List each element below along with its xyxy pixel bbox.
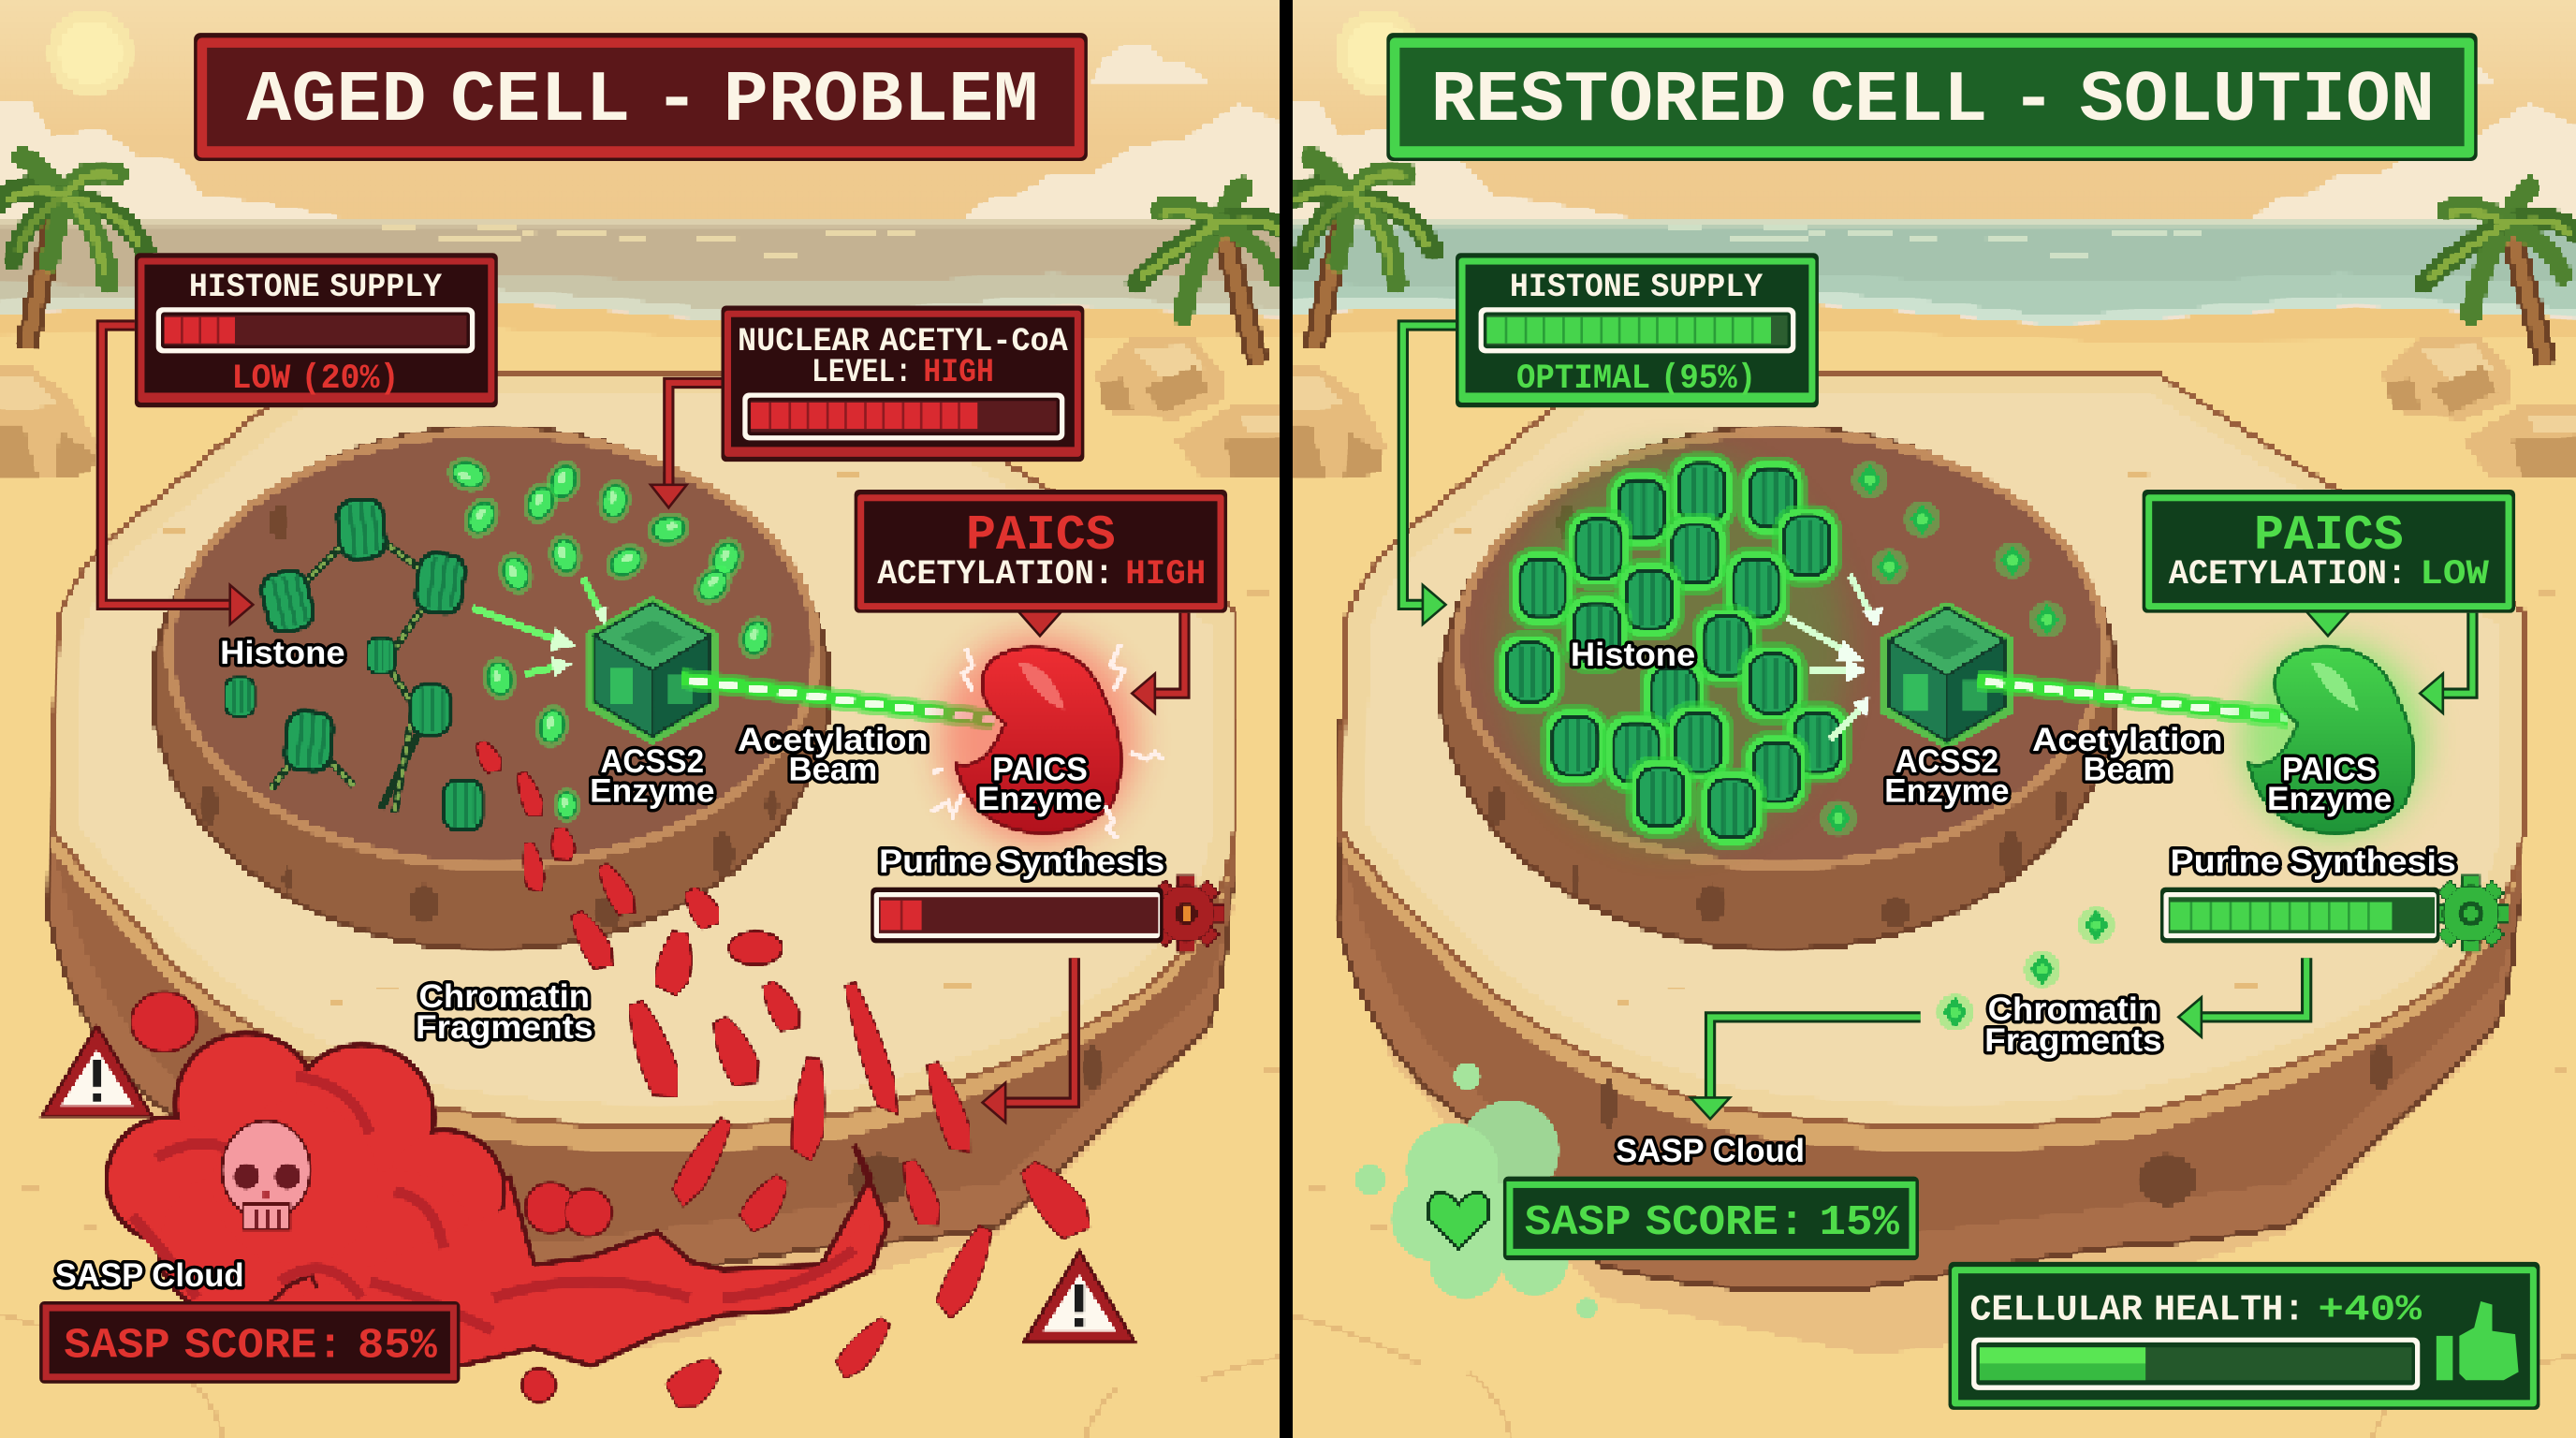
beach scene and cell platform, left: [0, 0, 1298, 1438]
title: aged cell: AGED CELL - PROBLEM: [246, 61, 1038, 142]
label: PAICS Enzyme: PAICS: [992, 752, 1088, 788]
SASP cloud with tail: [107, 1034, 887, 1365]
panel: nuclear acetyl-CoA: [721, 305, 1084, 462]
beach scene and cell platform, right: [1271, 0, 2576, 1438]
icon: skull: [222, 1121, 311, 1229]
free acetyl dots: [1821, 462, 2115, 1030]
panel: nuclear acetyl-CoA: NUCLEAR ACETYL-CoA: [738, 323, 1069, 360]
cell contents, right: [1355, 452, 2509, 1318]
ACSS2 enzyme cube: [1881, 601, 2012, 749]
panel: PAICS acetylation low: PAICS: [2254, 507, 2404, 564]
connector: PAICS box to enzyme: [2420, 613, 2472, 713]
panel: histone supply: OPTIMAL (95%): [1516, 360, 1756, 399]
panel: restored cell (solution): [1271, 0, 2576, 1438]
gear, green: [2433, 875, 2509, 951]
label: Acetylation Beam: Acetylation: [738, 722, 929, 758]
panel text and UI, right: [1386, 33, 2539, 1410]
panel: cellular health: +40%: [2318, 1289, 2422, 1330]
label: Chromatin Fragments: Chromatin: [419, 978, 590, 1015]
gauge: purine synthesis: [2160, 888, 2439, 943]
connector: histone supply to histone: [102, 326, 253, 624]
gauge: purine synthesis: [871, 888, 1164, 943]
label: ACSS2 Enzyme: [1884, 743, 2009, 809]
PAICS enzyme, red: [931, 634, 1164, 844]
panel: cellular health: [1949, 1262, 2539, 1410]
connector: purine synthesis to fragments: [983, 958, 1075, 1123]
connector: purine to fragments: [2178, 958, 2306, 1036]
flow arrows into ACSS2: [1788, 575, 1882, 740]
label: Chromatin Fragments: Chromatin: [1988, 991, 2159, 1028]
gear, red: [1149, 875, 1224, 951]
cell contents, left: [43, 452, 1224, 1416]
panel: PAICS acetylation low: [2143, 490, 2515, 636]
label: Chromatin Fragments: Fragments: [1984, 1022, 2162, 1059]
label: ACSS2 Enzyme: Enzyme: [1884, 772, 2009, 809]
ACSS2 enzyme cube: [587, 596, 718, 744]
panel: PAICS acetylation high: [855, 490, 1227, 636]
title: aged cell: [194, 33, 1088, 161]
label: Purine Synthesis: Purine Synthesis: [2170, 844, 2456, 880]
icon: thumbs up: [2437, 1301, 2519, 1380]
divider: [1280, 0, 1295, 1438]
flow arrows into ACSS2: [473, 579, 607, 677]
label: PAICS Enzyme: [977, 752, 1103, 817]
acetylation beam: [681, 679, 994, 720]
red chromatin fragments: [131, 738, 1100, 1416]
connector: fragments to SASP cloud: [1690, 1017, 1921, 1119]
PAICS enzyme, green: [2241, 640, 2425, 838]
readout: SASP score: [39, 1301, 460, 1384]
panel: histone supply: HISTONE SUPPLY: [189, 269, 442, 306]
connector: acetyl-CoA to nucleus: [651, 383, 721, 507]
SASP cloud, faded green: [1355, 1064, 1597, 1318]
icon: warning triangle left: [43, 1027, 151, 1116]
title: restored cell: [1386, 33, 2478, 161]
label: SASP Cloud: SASP Cloud: [55, 1257, 244, 1294]
label: Acetylation Beam: Beam: [788, 752, 877, 788]
panel text and UI, left: [39, 33, 1227, 1384]
panel: cellular health: CELLULAR HEALTH:: [1969, 1289, 2305, 1330]
label: Histone: Histone: [1571, 637, 1695, 673]
panel: PAICS acetylation low: LOW: [2420, 555, 2490, 594]
panel: histone supply: [135, 253, 498, 407]
label: PAICS Enzyme: [2267, 752, 2392, 817]
readout: SASP score: SASP SCORE: 15%: [1525, 1198, 1900, 1247]
title: restored cell: RESTORED CELL - SOLUTION: [1431, 61, 2435, 142]
label: ACSS2 Enzyme: [590, 743, 714, 809]
label: Chromatin Fragments: [416, 978, 593, 1046]
acetylation beam: [1978, 681, 2289, 718]
label: ACSS2 Enzyme: ACSS2: [1895, 743, 1998, 780]
panel: histone supply: [1456, 253, 1819, 407]
panel: histone supply: HISTONE SUPPLY: [1510, 269, 1763, 306]
label: Acetylation Beam: Acetylation: [2032, 722, 2223, 758]
panel: nuclear acetyl-CoA: HIGH: [923, 354, 994, 391]
connector: PAICS box to enzyme: [1132, 613, 1184, 713]
label: Acetylation Beam: [2032, 722, 2223, 788]
label: PAICS Enzyme: Enzyme: [977, 781, 1103, 817]
label: SASP Cloud: SASP Cloud: [1616, 1133, 1805, 1169]
glow behind histones: [1501, 452, 1847, 846]
panel: PAICS acetylation high: ACETYLATION:: [877, 555, 1114, 594]
icon: heart: [1428, 1193, 1489, 1249]
label: Acetylation Beam: Beam: [2083, 752, 2172, 788]
label: Purine Synthesis: Purine Synthesis: [879, 844, 1164, 880]
label: Chromatin Fragments: [1984, 991, 2162, 1059]
label: Acetylation Beam: [738, 722, 929, 788]
panel: PAICS acetylation low: ACETYLATION:: [2169, 555, 2407, 594]
free acetyl gems: [443, 452, 777, 822]
label: PAICS Enzyme: PAICS: [2282, 752, 2378, 788]
icon: warning triangle right: [1025, 1252, 1134, 1341]
panel: PAICS acetylation high: PAICS: [966, 507, 1116, 564]
readout: SASP score: [1503, 1177, 1919, 1260]
readout: SASP score: SASP SCORE: 85%: [64, 1322, 437, 1371]
label: ACSS2 Enzyme: ACSS2: [600, 743, 704, 780]
histone chain with sparse histones: [224, 495, 484, 831]
dense histones with glow: [1495, 452, 1852, 849]
label: ACSS2 Enzyme: Enzyme: [590, 772, 714, 809]
label: Chromatin Fragments: Fragments: [416, 1009, 593, 1046]
panel: aged cell (problem): [0, 0, 1298, 1438]
connector: histone supply to histones: [1403, 326, 1456, 624]
label: Histone: Histone: [220, 635, 345, 671]
label: PAICS Enzyme: Enzyme: [2267, 781, 2392, 817]
panel: histone supply: LOW (20%): [231, 360, 399, 399]
panel: PAICS acetylation high: HIGH: [1125, 555, 1206, 594]
panel: nuclear acetyl-CoA: LEVEL:: [812, 354, 912, 391]
